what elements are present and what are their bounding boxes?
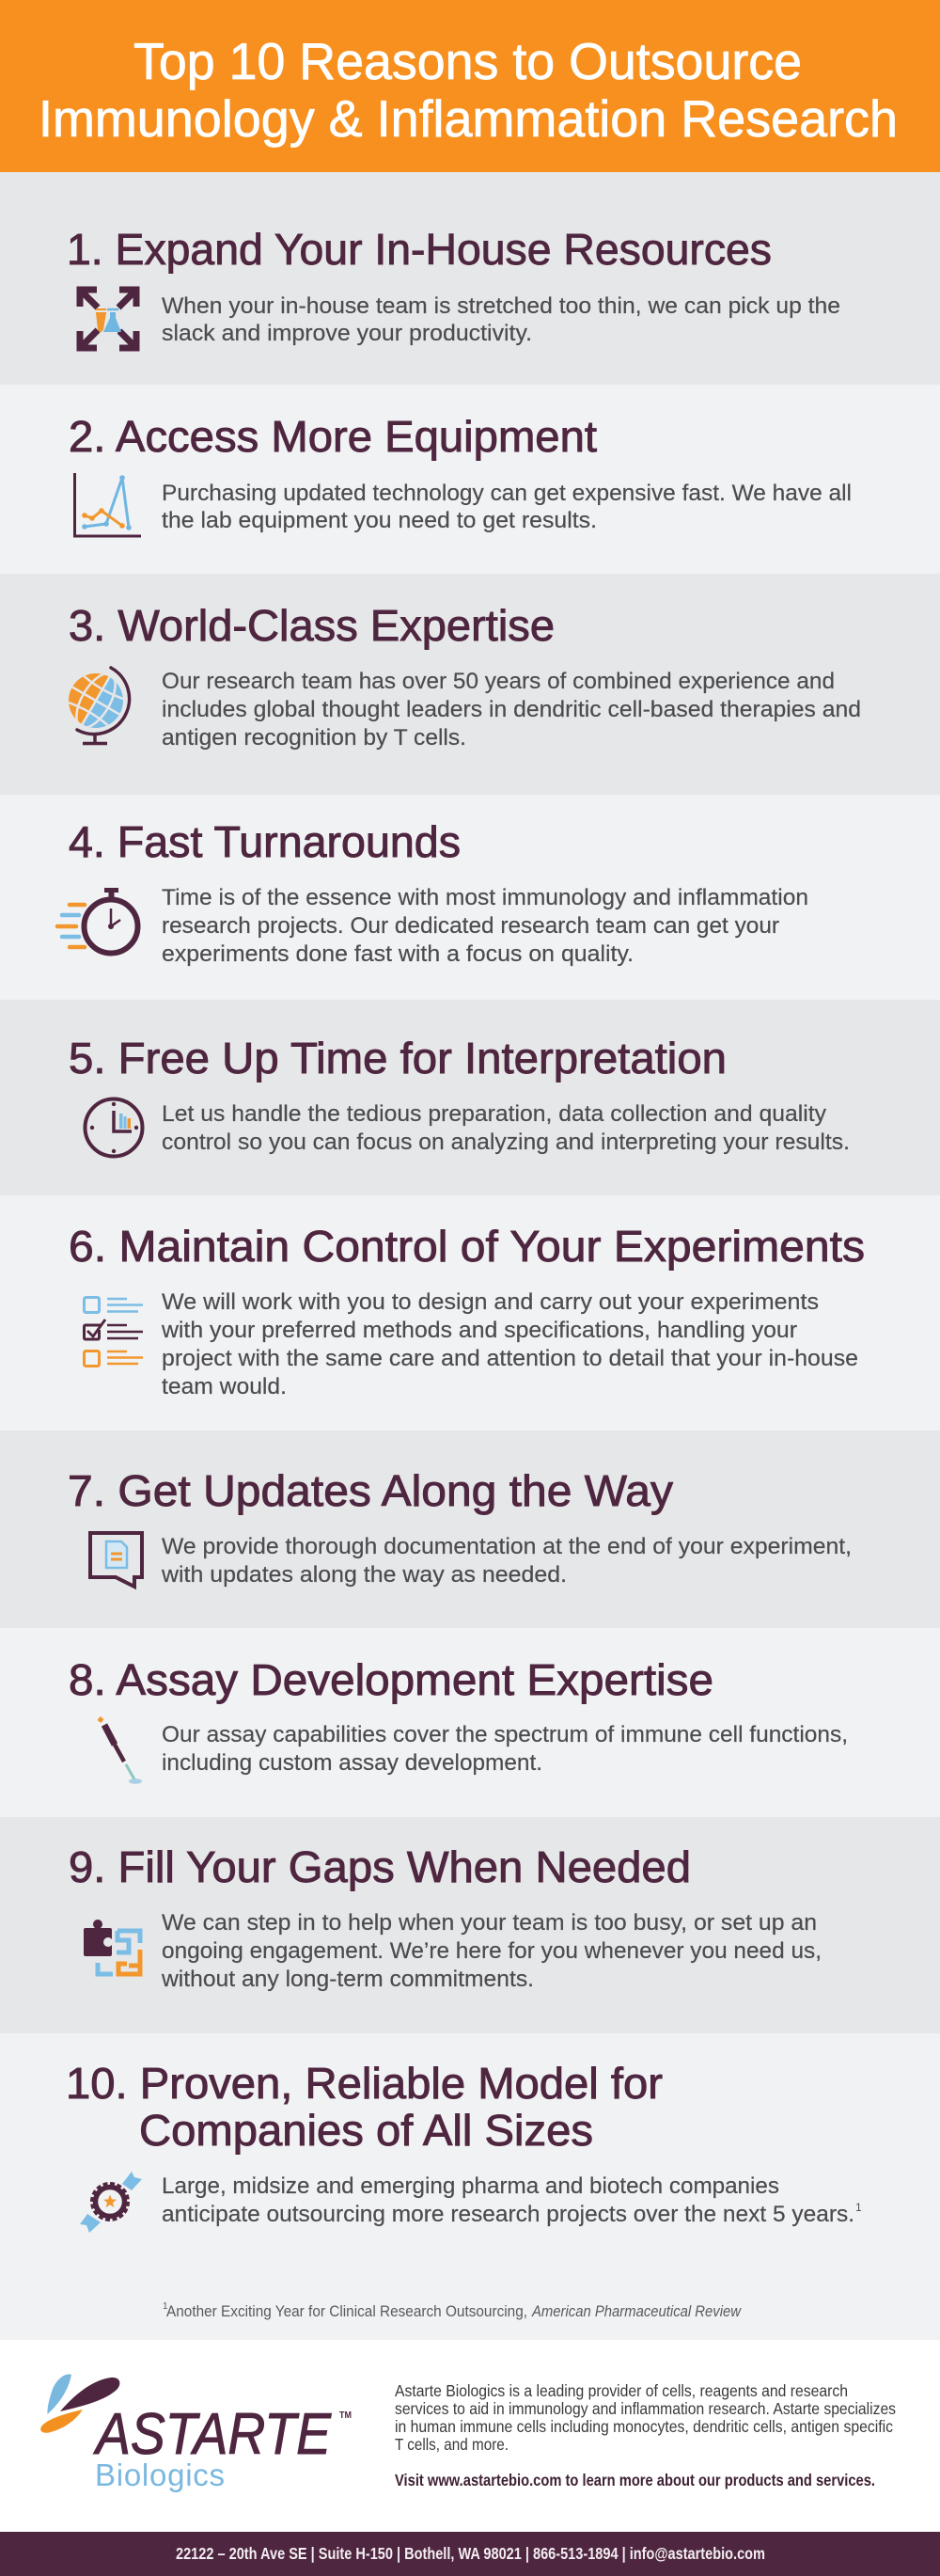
body text 9: without any long-term commitments. (161, 1967, 534, 1992)
panel: reason 9 (0, 1817, 940, 2033)
panel: reason 8 (0, 1628, 940, 1817)
icon: speech bubble with document (90, 1533, 142, 1587)
logo: Astarte Biologics: ASTARTE (92, 2402, 332, 2467)
body text 4 (162, 885, 808, 967)
icon: line chart (75, 473, 141, 536)
body text 7 (161, 1534, 852, 1588)
body text 5 (162, 1101, 850, 1155)
panel: reason 6 (0, 1195, 940, 1430)
icon: clock with bars (85, 1098, 143, 1157)
heading 9: 9. Fill Your Gaps When Needed (69, 1842, 691, 1891)
title: Top 10 Reasons to Outsource (133, 32, 802, 90)
body text 1: slack and improve your productivity. (162, 321, 532, 346)
title (39, 32, 898, 148)
panel: reason 5 (0, 1000, 940, 1195)
icon: puzzle pieces (84, 1920, 140, 1974)
heading 3: 3. World-Class Expertise (69, 601, 555, 650)
heading 4: 4. Fast Turnarounds (69, 817, 461, 866)
heading 10 (66, 2059, 663, 2155)
about text: services to aid in immunology and inflammation research. Astarte specializes (395, 2399, 896, 2418)
heading 6: 6. Maintain Control of Your Experiments (69, 1222, 865, 1271)
body text 10: anticipate outsourcing more research projects over the next 5 years. (162, 2202, 854, 2227)
body text 6: team would. (162, 1374, 287, 1399)
about text: in human immune cells including monocytes, dendritic cells, antigen specific (395, 2417, 893, 2436)
body text 1 (162, 293, 840, 346)
body text 3 (162, 669, 861, 751)
body text 6 (161, 1289, 858, 1399)
about text: T cells, and more. (395, 2435, 509, 2454)
body text 2: Purchasing updated technology can get expensive fast. We have all (162, 481, 852, 506)
heading 10: Companies of All Sizes (139, 2106, 593, 2155)
panel: reason 1 (0, 172, 940, 385)
body text 9 (161, 1910, 822, 1992)
heading 8: 8. Assay Development Expertise (69, 1655, 713, 1704)
body text 4: Time is of the essence with most immunology and inflammation (162, 885, 808, 910)
logo: Astarte Biologics (40, 2374, 352, 2492)
about text: Astarte Biologics is a leading provider of cells, reagents and research (395, 2381, 848, 2400)
body text 5: Let us handle the tedious preparation, data collection and quality (162, 1101, 827, 1127)
body text 8: including custom assay development. (162, 1750, 542, 1776)
heading 5: 5. Free Up Time for Interpretation (69, 1034, 727, 1083)
body text 8: Our assay capabilities cover the spectrum of immune cell functions, (162, 1722, 848, 1747)
heading 1: 1. Expand Your In-House Resources (67, 225, 772, 274)
icon: stopwatch (57, 888, 137, 954)
panel: reason 10 (0, 2033, 940, 2340)
contact details: 22122 – 20th Ave SE | Suite H-150 | Bothell, WA 98021 | 866-513-1894 | info@astartebio.com (176, 2544, 765, 2563)
body text 10 (162, 2173, 862, 2227)
body text 4: experiments done fast with a focus on quality. (162, 941, 634, 967)
body text 6: with your preferred methods and specifications, handling your (161, 1318, 797, 1343)
body text 3: antigen recognition by T cells. (162, 725, 466, 751)
icon: globe (69, 666, 132, 745)
panel: reason 7 (0, 1430, 940, 1628)
body text 2 (162, 481, 852, 533)
footnote: American Pharmaceutical Review (531, 2302, 743, 2320)
body text 6: project with the same care and attention to detail that your in-house (162, 1346, 858, 1371)
body text 10: 1 (855, 2201, 862, 2214)
body text 9: ongoing engagement. We’re here for you whenever you need us, (162, 1938, 822, 1964)
panel: reason 2 (0, 385, 940, 574)
panel: reason 4 (0, 795, 940, 1000)
body text 5: control so you can focus on analyzing and interpreting your results. (162, 1130, 850, 1155)
panel: company info (0, 2340, 940, 2532)
body text 8 (162, 1722, 848, 1776)
icon: checklist (85, 1298, 143, 1366)
heading 10: 10. Proven, Reliable Model for (66, 2059, 663, 2108)
body text 3: Our research team has over 50 years of combined experience and (162, 669, 835, 694)
body text 3: includes global thought leaders in dendritic cell-based therapies and (162, 697, 861, 722)
footer bar (0, 2532, 940, 2576)
body text 7: with updates along the way as needed. (161, 1562, 567, 1588)
about text (395, 2381, 896, 2454)
body text 7: We provide thorough documentation at the end of your experiment, (162, 1534, 852, 1559)
body text 10: Large, midsize and emerging pharma and biotech companies (162, 2173, 779, 2199)
body text 1: When your in-house team is stretched too thin, we can pick up the (162, 293, 840, 319)
icon: expanding arrows with lab vials (80, 290, 136, 348)
logo: Astarte Biologics: TM (339, 2410, 352, 2421)
footnote: 1 (163, 2301, 168, 2312)
body text 6: We will work with you to design and carry out your experiments (162, 1289, 819, 1315)
footnote: Another Exciting Year for Clinical Research Outsourcing, (166, 2302, 527, 2320)
heading 2: 2. Access More Equipment (69, 412, 597, 461)
icon: award rosette (80, 2172, 142, 2233)
header banner (0, 0, 940, 172)
heading 7: 7. Get Updates Along the Way (68, 1466, 673, 1515)
footnote (163, 2301, 743, 2320)
panel: reason 3 (0, 574, 940, 795)
icon: pipette (99, 1718, 142, 1784)
body text 4: research projects. Our dedicated research team can get your (162, 913, 779, 939)
body text 2: the lab equipment you need to get results. (162, 508, 597, 533)
logo: Astarte Biologics: Biologics (95, 2457, 225, 2492)
body text 9: We can step in to help when your team is too busy, or set up an (162, 1910, 817, 1936)
title: Immunology & Inflammation Research (39, 89, 898, 148)
